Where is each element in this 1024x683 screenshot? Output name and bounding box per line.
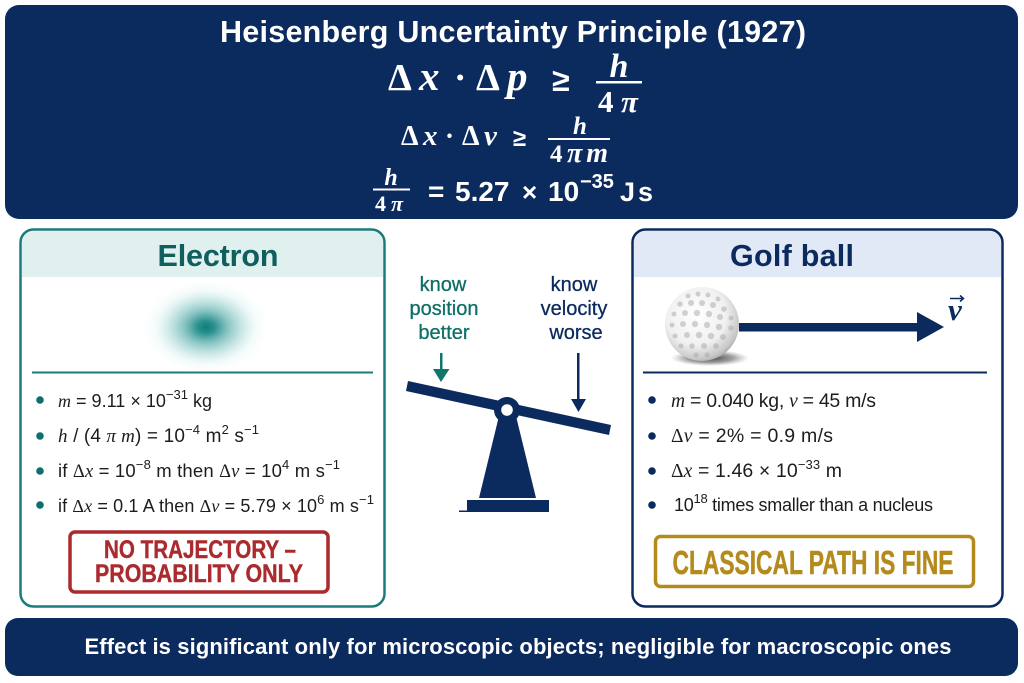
- electron example one: if Δx = 10: [58, 460, 136, 482]
- electron example two: m s: [325, 496, 359, 516]
- formula: position and velocity: Δ: [401, 121, 419, 152]
- conclusion banner: [5, 618, 1018, 676]
- formula: position and momentum: 4: [598, 84, 614, 119]
- electron example one: Δv = 10: [219, 460, 282, 482]
- stamp: no trajectory: PROBABILITY ONLY: [95, 560, 303, 588]
- formula: reduced constant value: ×: [522, 177, 537, 207]
- electron example one: −8: [136, 457, 151, 472]
- icon: golf ball: [665, 287, 749, 366]
- arrow: velocity: [739, 312, 944, 342]
- golf ball position uncertainty: −33: [798, 457, 820, 472]
- arrow: velocity: [571, 353, 586, 412]
- formula: position and velocity: [401, 113, 610, 169]
- formula: position and velocity: x: [422, 120, 438, 152]
- formula: reduced constant value: 4: [375, 191, 386, 216]
- electron example two: −1: [359, 492, 374, 507]
- golf ball comparison: 18: [693, 491, 708, 506]
- formula: position and momentum: [388, 48, 642, 119]
- formula: reduced constant value: J s: [620, 177, 653, 207]
- stamp: no trajectory: NO TRAJECTORY –: [104, 536, 296, 564]
- formula: position and velocity: v: [484, 120, 498, 152]
- electron constant: s: [229, 426, 244, 447]
- formula: position and momentum: ≥: [552, 62, 570, 98]
- formula: reduced constant value: h: [384, 165, 398, 191]
- electron constant: −4: [185, 422, 200, 437]
- golf ball position uncertainty: Δx = 1.46 × 10: [671, 460, 798, 482]
- beam and fulcrum: [406, 381, 611, 512]
- label: know velocity worse: worse: [548, 322, 603, 344]
- electron mass: m = 9.11 × 10: [58, 391, 166, 411]
- seesaw diagram: [406, 274, 611, 512]
- golf ball comparison: 10: [674, 495, 694, 515]
- arrow: position: [433, 353, 450, 382]
- formula: reduced constant value: 10: [548, 176, 579, 207]
- heading: electron: Electron: [158, 239, 278, 273]
- electron constant: h / (4 π m) = 10: [58, 426, 185, 447]
- electron facts list: [36, 387, 374, 516]
- title: Heisenberg Uncertainty Principle (1927): [220, 15, 806, 49]
- golf ball velocity uncertainty: Δv = 2% = 0.9 m/s: [671, 425, 833, 447]
- formula: position and velocity: ·: [445, 121, 454, 151]
- label: velocity vector: v: [948, 292, 963, 327]
- formula: position and velocity: Δ: [462, 121, 480, 152]
- electron constant: −1: [244, 422, 259, 437]
- electron example one: m then: [151, 460, 219, 481]
- formula: position and velocity: πm: [567, 138, 608, 169]
- conclusion banner: Effect is significant only for microscopic objects; negligible for macroscopic ones: [84, 634, 952, 659]
- golf ball comparison: times smaller than a nucleus: [707, 495, 933, 515]
- stamp: classical path: [656, 536, 974, 586]
- electron mass: −31: [166, 387, 188, 402]
- formula: position and velocity: ≥: [513, 125, 526, 152]
- electron example one: m s: [289, 460, 325, 481]
- formula: reduced constant value: π: [391, 191, 404, 216]
- electron constant: 2: [222, 422, 229, 437]
- golf ball facts list: [648, 390, 933, 515]
- formula: reduced constant value: 5.27: [455, 176, 510, 207]
- formula: position and momentum: x: [418, 53, 440, 99]
- electron mass: kg: [188, 391, 212, 411]
- label: know position better: position: [410, 298, 478, 320]
- label: know position better: better: [418, 322, 470, 344]
- formula: position and momentum: Δ: [476, 57, 500, 99]
- formula: position and velocity: h: [573, 113, 587, 140]
- panel: golf ball: [632, 230, 1002, 606]
- header panel: [5, 5, 1018, 219]
- formula: position and momentum: ·: [454, 58, 466, 99]
- formula: position and momentum: Δ: [388, 57, 412, 99]
- electron example one: −1: [325, 457, 340, 472]
- panel: electron: [20, 230, 384, 606]
- label: know position better: know: [420, 274, 467, 296]
- electron constant: m: [200, 426, 221, 447]
- heading: golf ball: Golf ball: [730, 239, 854, 273]
- icon: electron probability cloud: [144, 281, 268, 373]
- label: know velocity worse: know: [551, 274, 598, 296]
- formula: reduced constant value: −35: [580, 171, 614, 193]
- label: know velocity worse: velocity: [541, 298, 607, 320]
- electron example two: if Δx = 0.1 A then Δv = 5.79 × 10: [58, 496, 317, 516]
- formula: reduced constant value: [373, 165, 653, 216]
- golf ball mass and speed: m = 0.040 kg, v = 45 m/s: [671, 390, 876, 412]
- formula: position and velocity: 4: [550, 141, 563, 168]
- formula: reduced constant value: =: [428, 176, 444, 207]
- golf ball position uncertainty: m: [820, 460, 842, 482]
- stamp: no trajectory: [70, 532, 328, 592]
- electron example one: 4: [282, 457, 289, 472]
- formula: position and momentum: h: [610, 48, 628, 85]
- electron example two: 6: [317, 492, 324, 507]
- formula: position and momentum: π: [621, 84, 639, 119]
- formula: position and momentum: p: [504, 53, 528, 99]
